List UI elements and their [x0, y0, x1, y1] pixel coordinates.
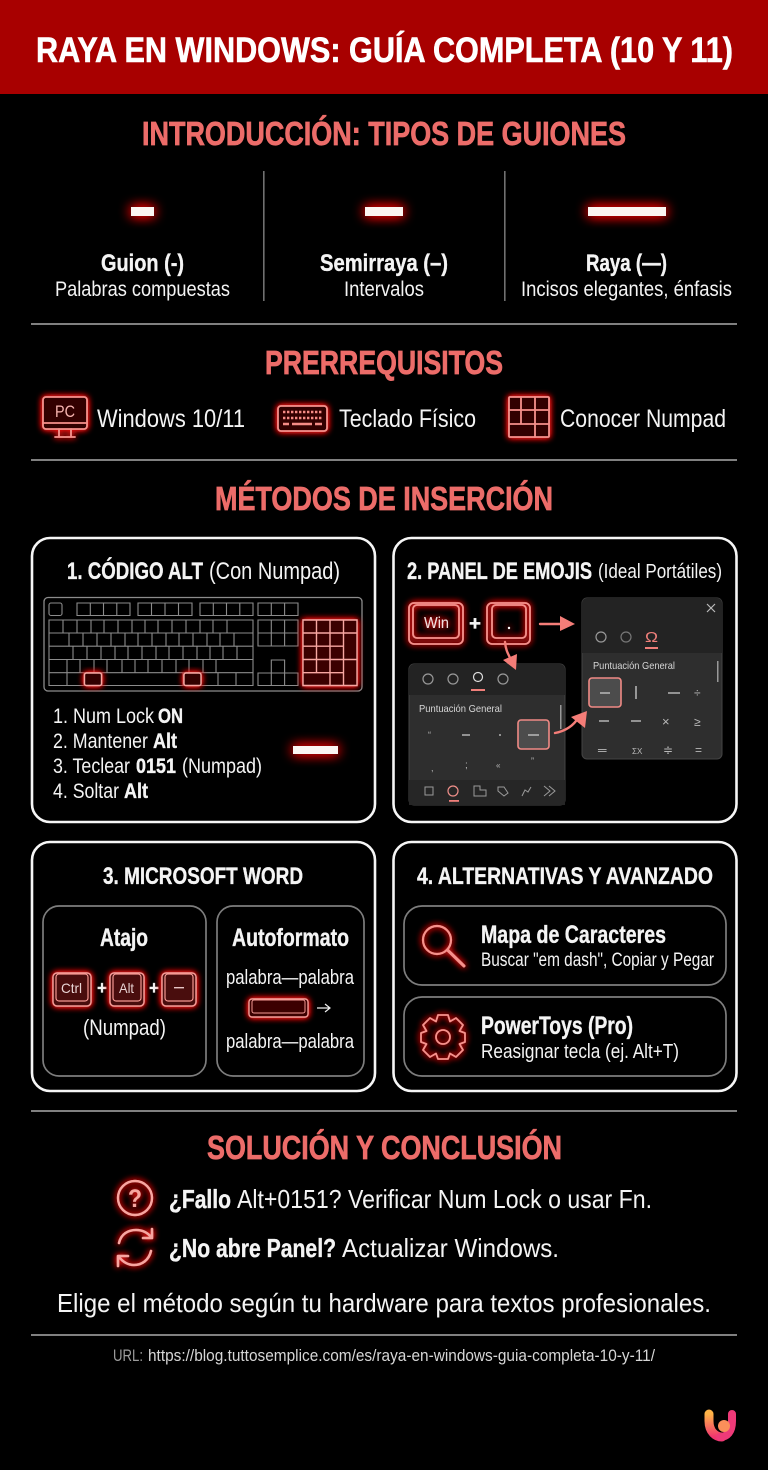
panel: 1 código alt: [32, 538, 375, 822]
heading: panel de emojis: 2. PANEL DE EMOJIS: [407, 558, 592, 585]
right emoji panel: [582, 598, 722, 759]
steps list: [53, 705, 262, 803]
sub-panel: powertoys: Reasignar tecla (ej. Alt+T): [481, 1041, 679, 1063]
heading: prerrequisitos: PRERREQUISITOS: [265, 345, 503, 382]
heading: código alt: (Con Numpad): [209, 558, 340, 585]
right emoji panel: ×: [662, 714, 670, 729]
minus key: [162, 973, 196, 1006]
panel: prerrequisitos: Conocer Numpad: [560, 405, 726, 433]
right emoji panel: ΣX: [632, 747, 643, 756]
icon: logo: [709, 1414, 732, 1437]
panel: 2 panel de emojis: [394, 538, 736, 822]
alt key: [110, 973, 144, 1006]
icon: gear: [421, 1015, 465, 1059]
heading: microsoft word: 3. MICROSOFT WORD: [103, 863, 303, 890]
left emoji panel: ;: [465, 760, 468, 771]
text: no abre panel: [169, 1233, 559, 1263]
arrow: [317, 1004, 330, 1012]
alt key: Alt: [119, 980, 134, 996]
steps list: ON: [158, 705, 183, 728]
sub-panel: atajo: [43, 906, 206, 1076]
steps list: Alt: [124, 780, 148, 803]
semirraya: Intervalos: [344, 278, 424, 301]
guion: Guion (-): [101, 250, 184, 277]
right emoji panel: ÷: [694, 686, 701, 700]
right emoji panel: ═: [597, 743, 607, 757]
source url: https://blog.tuttosemplice.com/es/raya-en-windows-guia-completa-10-y-11/: [148, 1346, 655, 1365]
heading: métodos de inserción: MÉTODOS DE INSERCIÓN: [215, 480, 553, 518]
result dash: [293, 746, 338, 754]
sub-panel: atajo: (Numpad): [83, 1015, 166, 1040]
space bar key: [249, 999, 308, 1017]
sub-panel: mapa de caracteres: Mapa de Caracteres: [481, 921, 666, 949]
left emoji panel: “: [428, 730, 431, 740]
heading: introducción: INTRODUCCIÓN: TIPOS DE GUIONES: [142, 115, 626, 153]
steps list: Alt: [153, 730, 177, 753]
right emoji panel: ≑: [663, 743, 673, 757]
ctrl key: [53, 973, 91, 1006]
alt key highlight: [84, 673, 102, 686]
win key: Win: [424, 615, 449, 632]
raya: Raya (—): [586, 250, 667, 277]
panel: prerrequisitos: Teclado Físico: [339, 405, 476, 433]
text: no abre panel: Actualizar Windows.: [342, 1233, 559, 1263]
panel: tipos de guiones: [55, 171, 732, 301]
sub-panel: autoformato: palabra—palabra: [226, 1031, 355, 1053]
panel: prerrequisitos: [43, 397, 726, 437]
plus sign: +: [469, 613, 481, 635]
sub-panel: powertoys: PowerToys (Pro): [481, 1012, 633, 1040]
icon: question: [118, 1181, 152, 1215]
title banner: [0, 0, 768, 94]
panel: 3 microsoft word: [32, 842, 375, 1091]
heading: panel de emojis: (Ideal Portátiles): [598, 561, 722, 583]
right emoji panel: Ω: [645, 629, 658, 646]
sub-panel: mapa de caracteres: [404, 906, 726, 985]
raya: [521, 207, 732, 301]
steps list: 1. Num Lock: [53, 705, 154, 728]
left emoji panel: Puntuación General: [419, 703, 502, 715]
guion: Palabras compuestas: [55, 278, 230, 301]
semirraya: [320, 207, 448, 301]
win key: [409, 603, 463, 644]
left emoji panel: ”: [531, 756, 534, 766]
sub-panel: autoformato: Autoformato: [232, 924, 349, 952]
text: fallo alt: Alt+0151? Verificar Num Lock o usar Fn.: [237, 1184, 652, 1214]
right emoji panel: =: [695, 743, 702, 757]
steps list: 3. Teclear: [53, 755, 130, 778]
panel: 4 alternativas y avanzado: [394, 842, 736, 1091]
sub-panel: autoformato: [217, 906, 364, 1076]
sub-panel: atajo: +: [149, 978, 159, 998]
icon: keyboard: [278, 406, 327, 431]
icon: refresh: [118, 1229, 152, 1266]
raya: Incisos elegantes, énfasis: [521, 278, 732, 301]
left emoji panel: ,: [431, 763, 434, 773]
steps list: 4. Soltar: [53, 780, 119, 803]
icon: pc monitor: PC: [55, 402, 75, 421]
heading: código alt: 1. CÓDIGO ALT: [67, 557, 203, 585]
sub-panel: mapa de caracteres: Buscar "em dash", Copiar y Pegar: [481, 950, 715, 971]
left emoji panel: [409, 664, 565, 805]
sub-panel: atajo: Atajo: [100, 924, 148, 952]
arrow: to right panel: [540, 616, 575, 631]
sub-panel: powertoys: [404, 997, 726, 1076]
steps list: 0151: [136, 755, 176, 778]
keyboard diagram: [44, 598, 362, 691]
semirraya: Semirraya (–): [320, 250, 448, 277]
right emoji panel: Puntuación General: [593, 660, 675, 672]
conclusion text: Elige el método según tu hardware para textos profesionales.: [57, 1288, 711, 1318]
heading: código alt: [67, 557, 340, 585]
period key: [487, 603, 530, 644]
text: no abre panel: ¿No abre Panel?: [169, 1233, 336, 1263]
numpad highlight: [303, 620, 357, 686]
panel: prerrequisitos: Windows 10/11: [97, 405, 245, 433]
sub-panel: atajo: +: [97, 978, 107, 998]
source url: URL:: [113, 1346, 143, 1365]
arrow: to left panel: [503, 642, 517, 670]
alt gr key highlight: [184, 673, 201, 686]
text: fallo alt: ¿Fallo: [169, 1184, 231, 1214]
panel: solución: [118, 1181, 652, 1266]
icon: numpad: [509, 397, 549, 437]
steps list: 2. Mantener: [53, 730, 148, 753]
sub-panel: autoformato: palabra—palabra: [226, 967, 355, 989]
guion: [55, 207, 230, 301]
left emoji panel: «: [496, 761, 501, 770]
icon: pc monitor: [43, 397, 87, 437]
right emoji panel: ≥: [694, 715, 701, 729]
ctrl key: Ctrl: [61, 980, 82, 996]
icon: question: ?: [128, 1185, 142, 1213]
arrow: between panels: [555, 711, 587, 733]
icon: magnifier: [423, 926, 464, 966]
heading: solución y conclusión: SOLUCIÓN Y CONCLUSIÓN: [207, 1129, 562, 1167]
steps list: (Numpad): [182, 755, 262, 778]
